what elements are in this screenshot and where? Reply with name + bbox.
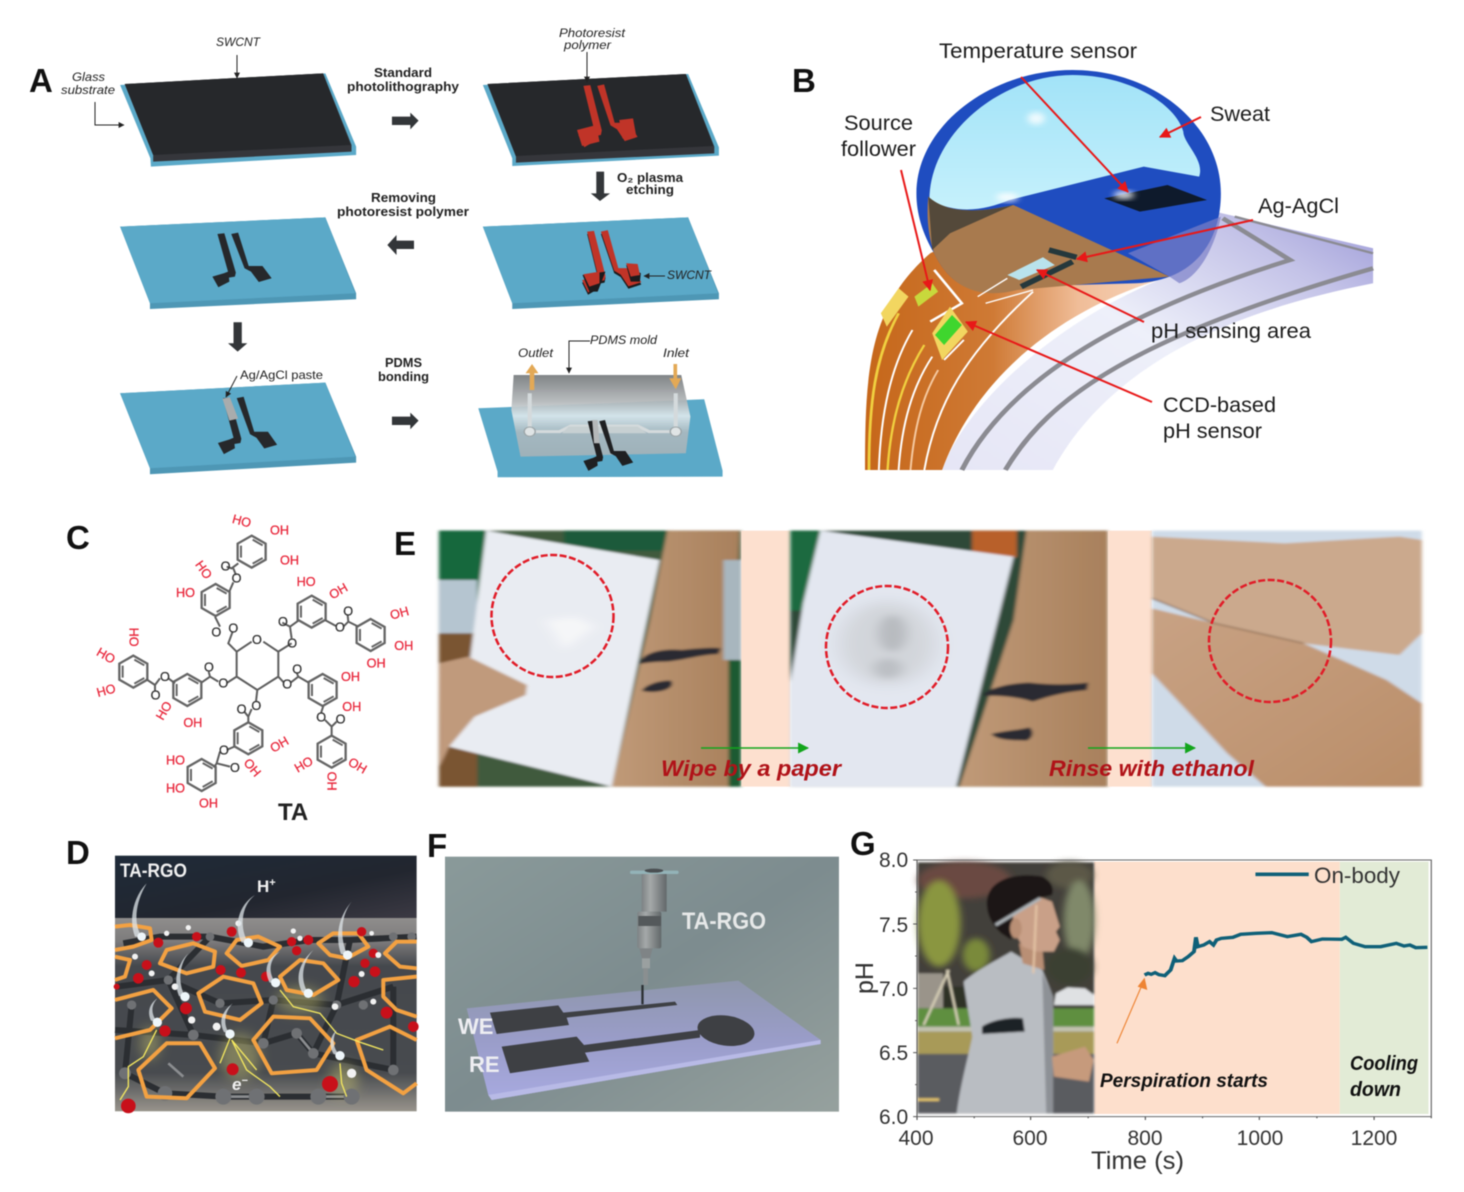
step 3: after removing photoresist	[120, 217, 356, 309]
step 2: photoresist on SWCNT	[483, 74, 719, 166]
hydroxyl groups: OH	[389, 604, 410, 623]
panel F: direct ink writing	[427, 827, 839, 1112]
electron label: e	[232, 1075, 241, 1094]
peach separator	[741, 531, 790, 787]
hydroxyl groups: HO	[94, 645, 118, 667]
annotation: perspiration starts: Perspiration starts	[1100, 1071, 1268, 1092]
labels of panel A: SWCNT	[667, 268, 713, 282]
photo 3: clean arm	[1152, 531, 1422, 787]
hydroxyl groups: OH	[199, 797, 218, 811]
oxygen atoms	[151, 559, 353, 775]
red callout arrows	[901, 77, 1253, 402]
hydroxyl groups: HO	[192, 558, 215, 582]
x axis title: Time (s)	[1091, 1147, 1184, 1175]
y axis title: pH	[851, 962, 879, 994]
axes	[917, 860, 1431, 1117]
oxygen atoms: O	[211, 626, 221, 640]
hydroxyl groups: HO	[176, 586, 195, 600]
process arrow: add paste	[228, 322, 247, 352]
x tick labels: 800	[1127, 1127, 1163, 1150]
oxygen atoms: O	[230, 761, 240, 775]
hydroxyl groups: HO	[297, 575, 316, 589]
hydroxyl groups: OH	[346, 755, 369, 777]
red dashed circle: clean arm	[1209, 580, 1331, 702]
hydroxyl groups: OH	[327, 581, 350, 602]
TA caption: TA	[278, 799, 308, 826]
x tick labels: 1000	[1237, 1127, 1283, 1150]
labels of panel A: photoresist polymer	[337, 204, 469, 219]
sensor blocks on substrate	[881, 283, 968, 360]
y tick labels: 8.0	[879, 849, 908, 872]
caption: wipe: Wipe by a paper	[661, 756, 843, 781]
oxygen atoms: O	[278, 615, 288, 629]
oxygen atoms: O	[316, 711, 326, 725]
labels of panel A: SWCNT	[216, 35, 262, 49]
dark backdrop	[115, 856, 417, 918]
hydroxyl groups: OH	[342, 700, 361, 714]
hydroxyl groups: HO	[166, 782, 185, 796]
hydroxyl groups: OH	[183, 716, 202, 730]
RE label: RE	[469, 1052, 500, 1077]
orange flexible substrate	[865, 210, 1169, 470]
hydroxyl groups: OH	[341, 670, 360, 684]
oxygen atoms: O	[232, 572, 242, 586]
hydroxyl groups: OH	[280, 553, 299, 567]
panel label A: A	[29, 62, 53, 99]
green arrow 2	[1088, 747, 1195, 749]
red dashed circle: paper 2	[826, 586, 948, 708]
process arrow: PDMS bonding	[392, 413, 419, 429]
labels of panel B: follower	[841, 138, 916, 161]
legend text: On-body	[1314, 863, 1400, 888]
labels of panel A: Outlet	[518, 346, 554, 360]
caption: rinse: Rinse with ethanol	[1049, 756, 1255, 781]
oxygen atoms: O	[151, 688, 161, 702]
H+ label: +	[269, 877, 276, 889]
annotation: cooling down: Cooling	[1350, 1053, 1418, 1075]
oxygen atoms: O	[336, 713, 346, 727]
carbon atoms	[119, 932, 416, 1105]
cooling region	[1340, 862, 1429, 1114]
hydroxyl groups: OH	[268, 734, 291, 755]
TA-RGO label: TA-RGO	[120, 861, 187, 882]
droplet dome	[916, 70, 1221, 292]
WE label: WE	[458, 1014, 493, 1039]
step 6: PDMS mold bonded	[478, 364, 723, 477]
hydroxyl groups	[94, 512, 413, 811]
labels of panel B: Ag-AgCl	[1258, 195, 1339, 218]
process arrow: removing photoresist	[387, 235, 414, 255]
x tick labels	[898, 1127, 1397, 1150]
labels of panel A: PDMS	[385, 355, 422, 370]
runner photo	[918, 862, 1095, 1113]
labels of panel B: pH sensing area	[1151, 320, 1311, 343]
H+ label: H	[257, 877, 269, 896]
annotation: cooling down	[1350, 1053, 1418, 1101]
step 5: Ag/AgCl paste	[120, 383, 356, 474]
perspiration region	[1094, 862, 1340, 1114]
panel G: on-body pH chart	[850, 825, 1431, 1175]
oxygen atoms: O	[292, 662, 302, 676]
labels of panel A: substrate	[61, 83, 115, 97]
labels of panel A: photolithography	[347, 79, 460, 94]
axis ticks	[913, 860, 1431, 1120]
y tick labels: 7.0	[879, 978, 908, 1001]
electron glow	[140, 987, 358, 1097]
labels of panel A	[61, 26, 713, 384]
labels of panel A: Ag/AgCl paste	[240, 368, 323, 382]
labels of panel A: polymer	[563, 38, 612, 52]
annotation: cooling down: down	[1350, 1079, 1401, 1101]
proton glows	[137, 932, 352, 1060]
green arrow 1	[701, 747, 808, 749]
panel label E: E	[394, 525, 416, 562]
hydroxyl groups: HO	[292, 754, 316, 775]
red dashed circle: paper 1	[492, 555, 614, 677]
oxygen atoms: O	[221, 559, 231, 573]
labels of panel B	[841, 40, 1339, 443]
oxygen atoms: O	[218, 677, 228, 691]
labels of panel A: Removing	[371, 190, 436, 205]
syringe	[630, 869, 679, 1004]
panel label D: D	[66, 834, 90, 871]
orange graphene hexagons	[115, 925, 417, 1098]
panel E: wipe and rinse photos	[394, 525, 1422, 787]
lavender sheet	[942, 212, 1373, 470]
hydroxyl groups: HO	[231, 512, 253, 531]
white and yellow circuit traces	[869, 270, 1033, 470]
working electrode	[490, 1002, 677, 1034]
hydroxyl groups: OH	[241, 756, 264, 780]
labels of panel A: PDMS mold	[590, 333, 657, 347]
panel label C: C	[66, 519, 90, 556]
temperature sensor	[1104, 185, 1207, 212]
y tick labels: 7.5	[879, 914, 908, 937]
oxygen atoms: O	[228, 622, 238, 636]
panel label F: F	[427, 827, 447, 864]
panel A: fabrication process	[29, 26, 723, 477]
x tick labels: 400	[898, 1127, 934, 1150]
TA-RGO label: TA-RGO	[682, 908, 766, 935]
process arrow: O2 plasma etching	[591, 172, 610, 201]
labels of panel A: Glass	[72, 70, 105, 84]
photo 1: paper and arm	[439, 531, 741, 787]
oxygen atoms: O	[335, 621, 345, 635]
oxygen atoms: O	[160, 670, 170, 684]
carbon backbone sticks	[115, 937, 417, 1097]
oxygen atoms: O	[251, 699, 261, 713]
hydroxyl groups: HO	[95, 681, 117, 700]
hydroxyl groups: OH	[127, 628, 141, 647]
y tick labels: 6.0	[879, 1106, 908, 1129]
y tick labels	[879, 849, 908, 1129]
photo 2: smudged paper and arm	[790, 531, 1108, 787]
plate	[467, 981, 821, 1100]
oxygen atoms: O	[237, 703, 247, 717]
orange perspiration arrow	[1117, 979, 1145, 1043]
labels of panel A: O₂ plasma	[617, 170, 684, 185]
sugar ring and ester bonds	[146, 563, 358, 768]
labels of panel B: pH sensor	[1163, 420, 1262, 443]
hydroxyl groups: OH	[367, 657, 386, 671]
labels of panel A: Photoresist	[559, 26, 626, 40]
hydroxyl groups: OH	[270, 523, 289, 537]
step 1: SWCNT on glass substrate	[120, 73, 356, 167]
panel C: tannic acid structure	[66, 512, 413, 826]
labels of panel B: Sweat	[1210, 103, 1270, 126]
on-body pH curve	[1145, 933, 1427, 976]
highlights	[1028, 112, 1045, 124]
silver traces	[962, 217, 1373, 470]
molecule	[94, 512, 413, 811]
lightning electron paths	[120, 990, 383, 1100]
process arrow: standard photolithography	[392, 113, 419, 129]
panel label G: G	[850, 825, 876, 862]
oxygen atoms: O	[219, 743, 229, 757]
lattice floor	[115, 918, 417, 1111]
aromatic rings	[119, 536, 385, 791]
reference electrode	[502, 1030, 700, 1073]
brown skin seen through droplet	[928, 197, 1169, 293]
x tick labels: 1200	[1351, 1127, 1397, 1150]
legend line	[1255, 869, 1309, 880]
labels of panel B: Temperature sensor	[939, 40, 1137, 63]
background	[445, 857, 839, 1112]
electron label: −	[241, 1075, 248, 1087]
oxygen atoms: O	[287, 637, 297, 651]
oxygen atoms	[114, 927, 419, 1113]
x tick labels: 600	[1012, 1127, 1048, 1150]
oxygen atoms: O	[204, 661, 214, 675]
thin pointer arrows	[95, 52, 665, 397]
hydroxyl groups: HO	[166, 753, 185, 767]
panel B: sweat droplet on sensor	[792, 40, 1373, 470]
hydrogen atoms	[132, 920, 381, 1078]
oxygen atoms: O	[282, 678, 292, 692]
labels of panel B: Source	[844, 112, 913, 135]
hydroxyl groups: OH	[394, 639, 413, 653]
panel D: TA-RGO lattice	[66, 834, 419, 1113]
proton trails	[132, 883, 352, 1056]
panel label B: B	[792, 62, 816, 99]
hydroxyl groups: HO	[153, 699, 175, 723]
labels of panel A: Standard	[374, 65, 432, 80]
pH sensing area	[1007, 257, 1055, 280]
step 4: after O2 plasma etching	[483, 217, 719, 309]
labels of panel A: Inlet	[663, 346, 690, 360]
oxygen atoms: O	[343, 604, 353, 618]
labels of panel B: CCD-based	[1163, 394, 1276, 417]
oxygen atoms: O	[252, 633, 262, 647]
labels of panel A: etching	[626, 182, 674, 197]
y tick labels: 6.5	[879, 1042, 908, 1065]
hydroxyl groups: OH	[324, 772, 338, 791]
Ag-AgCl strip	[1021, 250, 1077, 287]
sweat highlight	[929, 75, 1200, 209]
peach separator	[1108, 531, 1152, 787]
labels of panel A: bonding	[378, 369, 429, 384]
semi-transparent droplet base	[1128, 217, 1221, 283]
